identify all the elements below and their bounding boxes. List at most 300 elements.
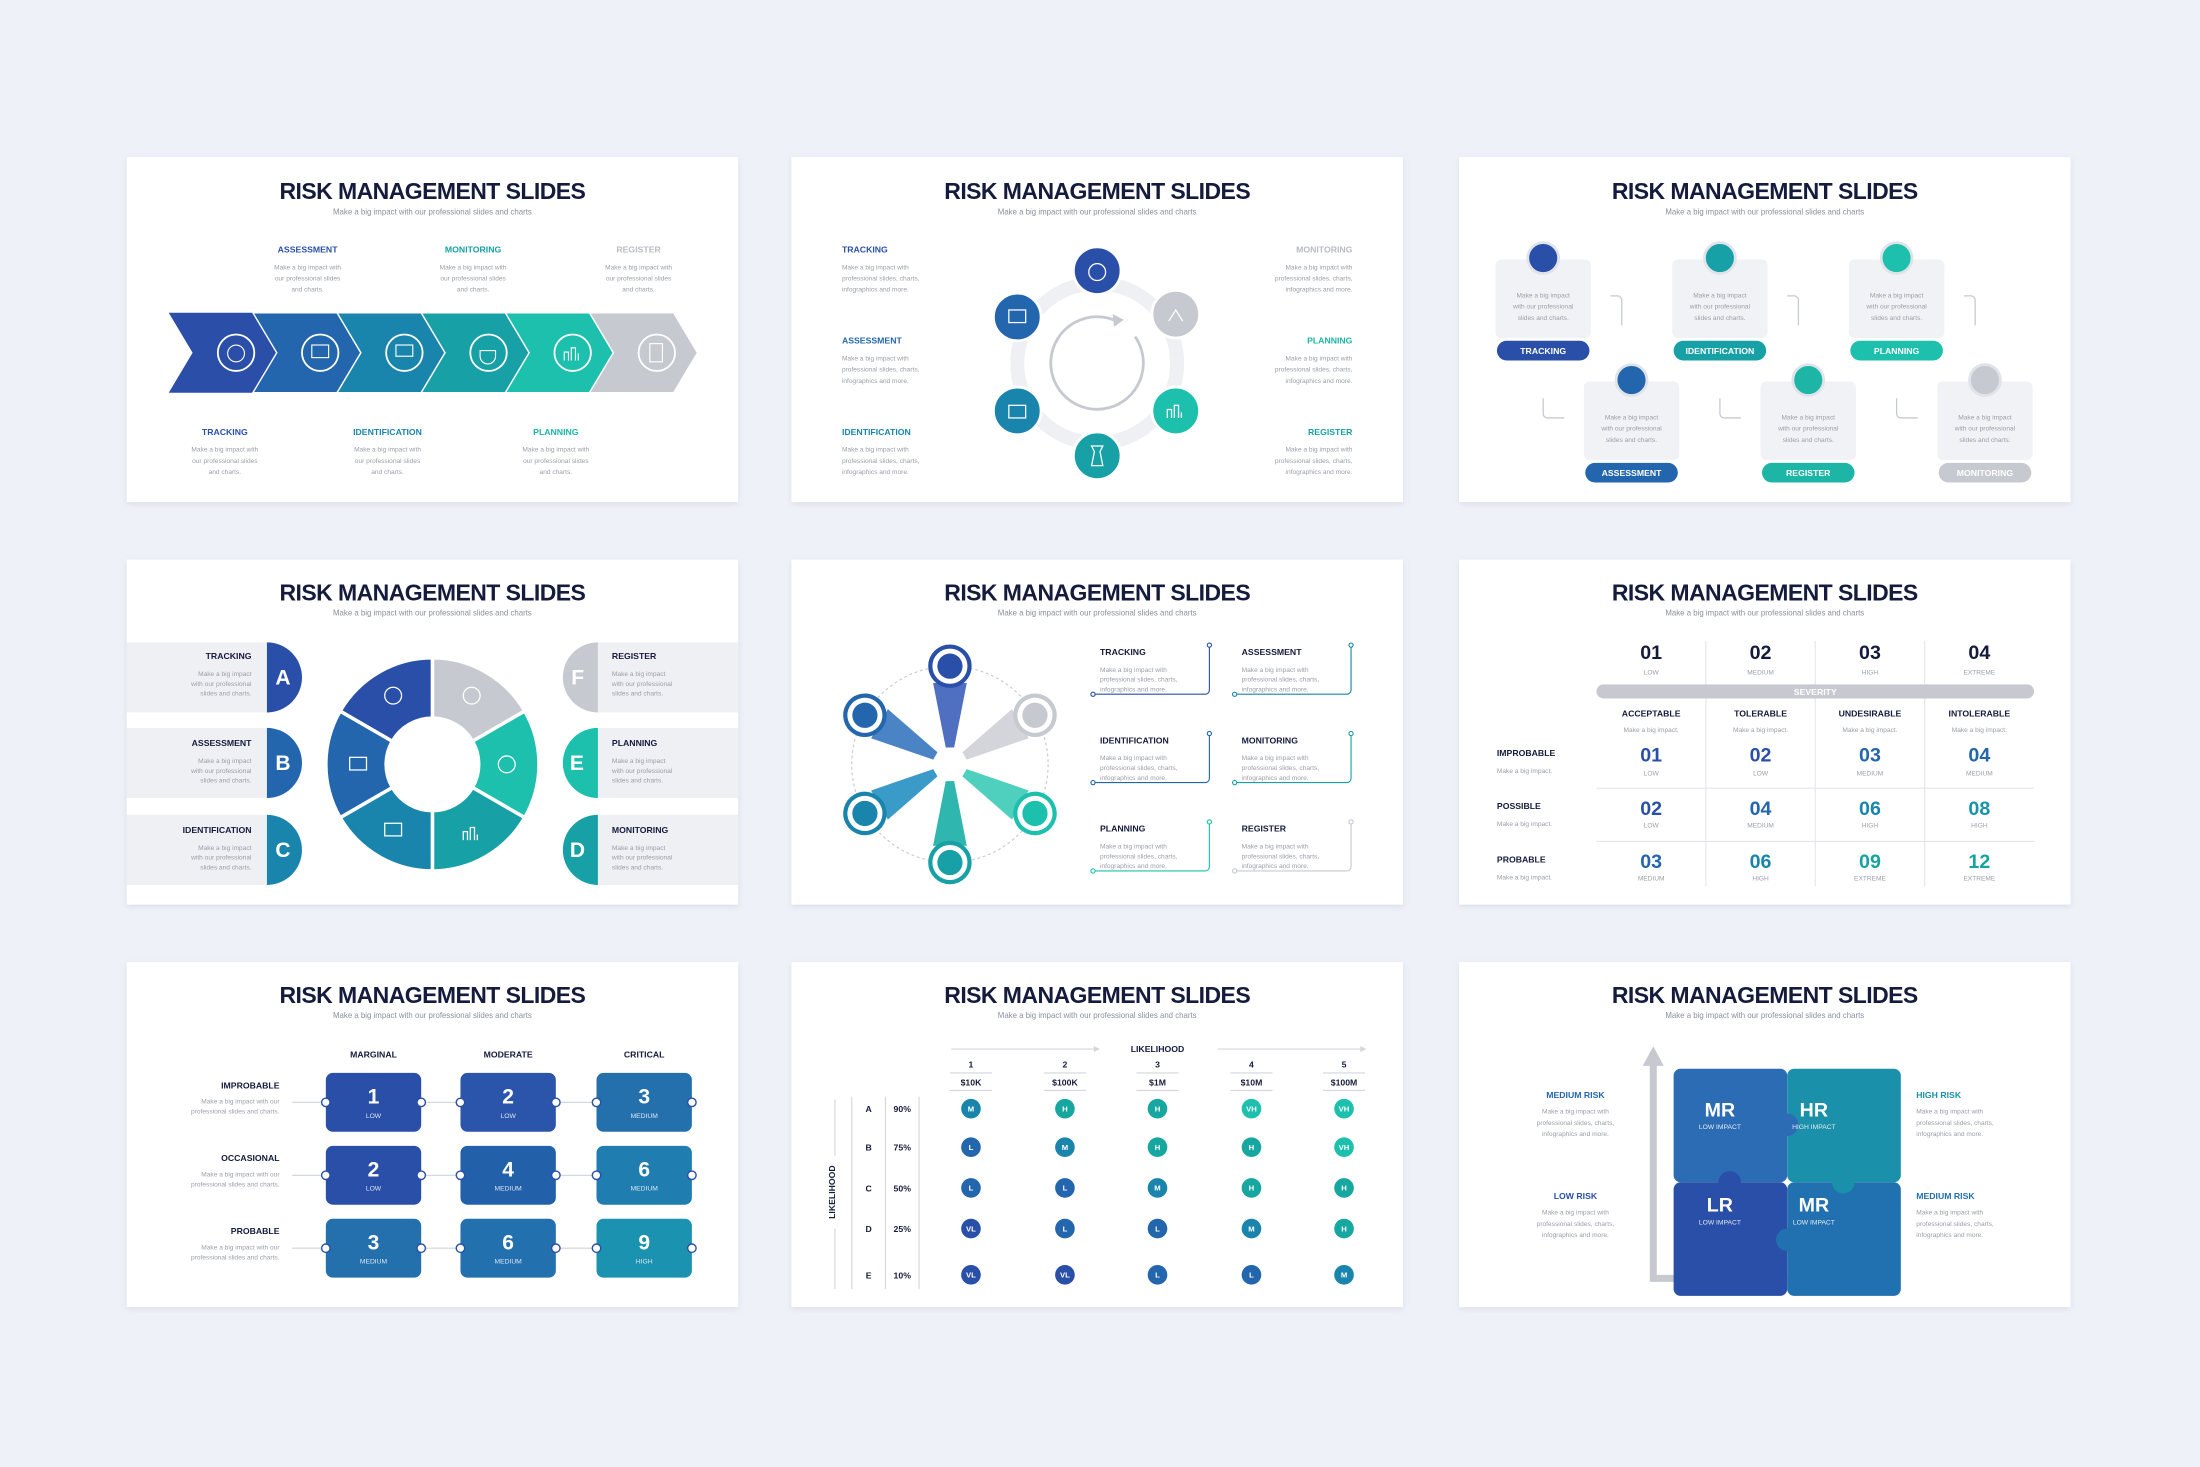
step labels top: Make a big impact with: [440, 264, 507, 271]
puzzle quadrants: HIGH IMPACT: [1792, 1124, 1836, 1131]
row labels: Make a big impact with our: [201, 1245, 280, 1252]
rating boxes: MEDIUM: [495, 1186, 522, 1193]
cards bottom row: slides and charts.: [1783, 437, 1834, 444]
cards top row: slides and charts.: [1694, 315, 1746, 322]
right labels: professional slides, charts,: [1275, 458, 1353, 465]
matrix table: MEDIUM: [1747, 822, 1774, 829]
heading: Make a big impact with our professional slides and charts: [333, 1011, 532, 1020]
rating dots: H: [1341, 1184, 1347, 1193]
left labels: professional slides, charts,: [842, 275, 920, 282]
risk labels: professional slides, charts,: [1537, 1221, 1614, 1228]
rating boxes: MEDIUM: [631, 1186, 658, 1193]
left items: with our professional: [190, 768, 252, 775]
heading: RISK MANAGEMENT SLIDES: [1612, 982, 1918, 1008]
right items: F: [571, 666, 584, 689]
text grid: PLANNING: [1100, 824, 1146, 834]
axis headers: $100K: [1052, 1078, 1078, 1088]
matrix table: LOW: [1644, 670, 1659, 677]
heading: Make a big impact with our professional slides and charts: [333, 609, 532, 618]
text grid: MONITORING: [1242, 735, 1298, 745]
right labels: PLANNING: [1307, 336, 1353, 346]
rating boxes: LOW: [500, 1113, 516, 1120]
right labels: REGISTER: [1308, 427, 1353, 437]
text grid: professional slides, charts,: [1100, 677, 1178, 684]
puzzle quadrants: [1674, 1069, 1901, 1296]
rating boxes: LOW: [366, 1113, 382, 1120]
heading: Make a big impact with our professional slides and charts: [333, 208, 532, 217]
matrix table: 01: [1640, 642, 1662, 664]
matrix table: MEDIUM: [1638, 876, 1665, 883]
matrix table: 02: [1750, 745, 1772, 767]
left labels: professional slides, charts,: [842, 458, 920, 465]
right items: [563, 642, 738, 885]
text grid: REGISTER: [1242, 824, 1287, 834]
matrix table: 02: [1640, 798, 1662, 820]
axis headers: 50%: [894, 1183, 911, 1193]
step labels top: REGISTER: [616, 244, 662, 254]
row labels: PROBABLE: [231, 1226, 280, 1236]
heading: RISK MANAGEMENT SLIDES: [944, 178, 1250, 204]
risk labels: [1537, 1090, 1994, 1239]
puzzle quadrants: LOW IMPACT: [1699, 1124, 1741, 1131]
cards bottom row: REGISTER: [1786, 468, 1831, 478]
rating dots: L: [969, 1143, 974, 1152]
puzzle quadrants: MR: [1705, 1099, 1735, 1121]
matrix table: Make a big impact.: [1842, 727, 1898, 734]
panel: slide 5 radial petals: [791, 560, 1403, 905]
row labels: professional slides and charts.: [191, 1109, 280, 1116]
heading: [944, 178, 1250, 217]
rating dots: M: [1154, 1184, 1161, 1193]
risk labels: infographics and more.: [1542, 1232, 1609, 1239]
matrix table: Make a big impact.: [1733, 727, 1788, 734]
risk labels: Make a big impact with: [1916, 1109, 1983, 1116]
step labels top: our professional slides: [440, 275, 507, 282]
left labels: Make a big impact with: [842, 355, 909, 362]
panel: slide 6 severity matrix: [1459, 560, 2071, 905]
rating boxes: 3: [368, 1232, 379, 1255]
left items: slides and charts.: [200, 865, 252, 872]
risk labels: Make a big impact with: [1542, 1109, 1609, 1116]
text grid: infographics and more.: [1100, 775, 1167, 782]
text grid: TRACKING: [1100, 647, 1146, 657]
rating dots: H: [1155, 1104, 1161, 1113]
matrix table: EXTREME: [1963, 670, 1996, 677]
heading: [279, 982, 586, 1020]
heading: Make a big impact with our professional slides and charts: [998, 1011, 1197, 1020]
right labels: Make a big impact with: [1286, 447, 1353, 454]
matrix table: TOLERABLE: [1734, 709, 1787, 719]
column headers: MARGINAL: [350, 1049, 398, 1059]
text grid: [1091, 643, 1353, 873]
matrix table: 04: [1968, 745, 1990, 767]
rating boxes: 1: [368, 1086, 380, 1109]
left items: [127, 642, 302, 885]
left labels: TRACKING: [842, 244, 888, 254]
rating dots: L: [1155, 1224, 1160, 1233]
right items: PLANNING: [612, 738, 658, 748]
row labels: professional slides and charts.: [191, 1254, 280, 1261]
cards bottom row: slides and charts.: [1959, 437, 2011, 444]
cards top row: Make a big impact: [1870, 292, 1923, 299]
right items: D: [570, 839, 585, 862]
panel: slide 7 impact boxes: [127, 962, 738, 1307]
matrix table: IMPROBABLE: [1497, 748, 1556, 758]
axis headers: $100M: [1331, 1078, 1357, 1088]
matrix table: SEVERITY: [1794, 687, 1837, 697]
right items: Make a big impact: [612, 758, 665, 765]
row labels: [191, 1080, 280, 1261]
text grid: Make a big impact with: [1242, 844, 1309, 851]
text grid: professional slides, charts,: [1242, 765, 1319, 772]
heading: RISK MANAGEMENT SLIDES: [1612, 579, 1918, 605]
right items: E: [570, 752, 584, 775]
rating dots: M: [1248, 1224, 1255, 1233]
rating boxes: LOW: [366, 1186, 382, 1193]
matrix table: LOW: [1753, 771, 1769, 778]
column headers: MODERATE: [484, 1049, 533, 1059]
text grid: infographics and more.: [1100, 686, 1167, 693]
matrix table: 03: [1859, 745, 1881, 767]
heading: RISK MANAGEMENT SLIDES: [279, 178, 586, 204]
matrix table: MEDIUM: [1857, 771, 1883, 778]
left items: A: [275, 666, 291, 689]
risk labels: HIGH RISK: [1916, 1090, 1962, 1100]
row labels: IMPROBABLE: [221, 1080, 280, 1090]
left labels: Make a big impact with: [842, 447, 909, 454]
axis headers: 3: [1155, 1059, 1160, 1069]
rating boxes: 2: [368, 1159, 379, 1182]
text grid: professional slides, charts,: [1242, 853, 1319, 860]
row labels: Make a big impact with our: [201, 1172, 280, 1179]
axis headers: 90%: [894, 1104, 911, 1114]
rating dots: L: [1155, 1271, 1160, 1280]
cards bottom row: Make a big impact: [1958, 414, 2012, 421]
step labels bottom: PLANNING: [533, 427, 579, 437]
left labels: infographics and more.: [842, 287, 909, 294]
heading: Make a big impact with our professional slides and charts: [1665, 208, 1864, 217]
step labels bottom: Make a big impact with: [522, 447, 590, 454]
right labels: Make a big impact with: [1286, 264, 1353, 271]
heading: Make a big impact with our professional slides and charts: [1665, 1011, 1864, 1020]
left items: Make a big impact: [198, 845, 252, 852]
right labels: infographics and more.: [1286, 469, 1353, 476]
axis headers: $10K: [961, 1078, 982, 1088]
text grid: Make a big impact with: [1242, 667, 1309, 674]
cards bottom row: with our professional: [1777, 426, 1839, 433]
right items: MONITORING: [612, 825, 668, 835]
matrix table: EXTREME: [1854, 876, 1886, 883]
heading: RISK MANAGEMENT SLIDES: [279, 579, 586, 605]
heading: [944, 579, 1250, 618]
left items: B: [275, 752, 291, 775]
rating dots: VH: [1339, 1143, 1350, 1152]
right items: Make a big impact: [612, 845, 665, 852]
rating boxes: 6: [502, 1232, 514, 1255]
step labels top: our professional slides: [606, 275, 672, 282]
matrix table: LOW: [1644, 822, 1659, 829]
axis headers: [827, 1044, 1365, 1289]
step labels bottom: our professional slides: [523, 458, 589, 465]
risk labels: infographics and more.: [1542, 1131, 1609, 1138]
puzzle quadrants: MR: [1799, 1195, 1829, 1217]
cards top row: TRACKING: [1520, 346, 1566, 356]
axis headers: $10M: [1241, 1078, 1262, 1088]
risk labels: Make a big impact with: [1916, 1210, 1983, 1217]
right items: slides and charts.: [612, 691, 663, 698]
step labels top: MONITORING: [445, 244, 501, 254]
puzzle quadrants: LR: [1707, 1195, 1733, 1217]
puzzle quadrants: LOW IMPACT: [1699, 1219, 1741, 1226]
axis headers: C: [865, 1183, 872, 1193]
puzzle quadrants: HR: [1800, 1099, 1828, 1121]
text grid: IDENTIFICATION: [1100, 735, 1169, 745]
matrix table: 02: [1750, 642, 1772, 664]
heading: [1612, 579, 1918, 618]
axis headers: LIKELIHOOD: [1131, 1044, 1184, 1054]
right labels: Make a big impact with: [1286, 355, 1353, 362]
matrix table: 04: [1750, 798, 1772, 820]
step labels top: our professional slides: [275, 275, 341, 282]
right labels: professional slides, charts,: [1275, 275, 1353, 282]
matrix table: Make a big impact.: [1624, 727, 1679, 734]
left items: Make a big impact: [198, 671, 252, 678]
rating boxes: 2: [502, 1086, 514, 1109]
rating dots: M: [1341, 1271, 1347, 1280]
matrix table: INTOLERABLE: [1949, 709, 2010, 719]
text grid: infographics and more.: [1100, 863, 1167, 870]
column headers: [350, 1049, 665, 1059]
panel: slide 9 puzzle quadrant: [1459, 962, 2071, 1307]
left items: C: [275, 839, 291, 862]
right items: Make a big impact: [612, 671, 665, 678]
matrix table: Make a big impact.: [1497, 768, 1552, 775]
row labels: OCCASIONAL: [221, 1153, 280, 1163]
step labels top: [274, 244, 672, 294]
step labels top: ASSESSMENT: [278, 244, 338, 254]
risk labels: professional slides, charts,: [1916, 1221, 1994, 1228]
left items: with our professional: [190, 681, 252, 688]
risk labels: infographics and more.: [1916, 1131, 1983, 1138]
matrix table: HIGH: [1862, 822, 1878, 829]
left items: slides and charts.: [200, 691, 252, 698]
left labels: [842, 244, 920, 476]
rating dots: L: [1063, 1184, 1068, 1193]
text grid: professional slides, charts,: [1100, 853, 1178, 860]
right labels: MONITORING: [1296, 244, 1353, 254]
rating boxes: HIGH: [636, 1259, 653, 1266]
chevron arrow: [169, 313, 697, 393]
left labels: professional slides, charts,: [842, 367, 920, 374]
matrix table: PROBABLE: [1497, 855, 1546, 865]
heading: Make a big impact with our professional slides and charts: [998, 208, 1197, 217]
risk labels: MEDIUM RISK: [1916, 1191, 1975, 1201]
rating dots: [961, 1099, 1354, 1285]
heading: [279, 579, 586, 618]
text grid: Make a big impact with: [1242, 755, 1309, 762]
matrix table: POSSIBLE: [1497, 801, 1541, 811]
text grid: Make a big impact with: [1100, 667, 1167, 674]
rating dots: H: [1249, 1143, 1255, 1152]
matrix table: UNDESIRABLE: [1839, 709, 1902, 719]
left items: TRACKING: [206, 651, 252, 661]
text grid: Make a big impact with: [1100, 844, 1167, 851]
risk labels: MEDIUM RISK: [1546, 1090, 1605, 1100]
heading: RISK MANAGEMENT SLIDES: [1612, 178, 1918, 204]
left labels: Make a big impact with: [842, 264, 909, 271]
axis headers: E: [866, 1270, 872, 1280]
right labels: [1275, 244, 1353, 476]
risk labels: LOW RISK: [1554, 1191, 1598, 1201]
matrix table: 01: [1640, 745, 1662, 767]
donut chart: [326, 658, 539, 871]
rating boxes: 3: [638, 1086, 650, 1109]
puzzle quadrants: LOW IMPACT: [1793, 1219, 1835, 1226]
step labels top: and charts.: [622, 287, 655, 294]
text grid: ASSESSMENT: [1242, 647, 1302, 657]
rating dots: L: [969, 1184, 974, 1193]
text grid: Make a big impact with: [1100, 755, 1167, 762]
heading: RISK MANAGEMENT SLIDES: [944, 579, 1250, 605]
row labels: Make a big impact with our: [201, 1099, 280, 1106]
left items: slides and charts.: [200, 778, 252, 785]
connector arrows: [1543, 296, 1975, 418]
matrix table: HIGH: [1862, 670, 1878, 677]
right labels: infographics and more.: [1286, 378, 1353, 385]
step labels bottom: our professional slides: [192, 458, 258, 465]
axis headers: A: [865, 1104, 872, 1114]
text grid: infographics and more.: [1242, 863, 1309, 870]
matrix table: MEDIUM: [1747, 670, 1774, 677]
rating dots: H: [1155, 1143, 1161, 1152]
heading: [1612, 178, 1918, 217]
rating dots: VL: [1060, 1271, 1070, 1280]
right items: with our professional: [611, 681, 673, 688]
right items: with our professional: [611, 855, 673, 862]
step labels bottom: [191, 427, 590, 476]
axis headers: $1M: [1149, 1078, 1166, 1088]
left items: Make a big impact: [198, 758, 252, 765]
cards bottom row: Make a big impact: [1605, 414, 1658, 421]
rating dots: L: [1249, 1271, 1254, 1280]
panel: slide 1 chevron process: [127, 157, 738, 502]
heading: RISK MANAGEMENT SLIDES: [279, 982, 586, 1008]
matrix table: Make a big impact.: [1952, 727, 2007, 734]
panel: slide 4 donut: [127, 560, 738, 905]
axis headers: 5: [1342, 1059, 1347, 1069]
cards top row: Make a big impact: [1693, 292, 1747, 299]
axis headers: 2: [1063, 1059, 1068, 1069]
matrix table: 04: [1968, 642, 1990, 664]
right items: with our professional: [611, 768, 673, 775]
heading: [1612, 982, 1918, 1020]
panel: slide 3 cards: [1459, 157, 2071, 502]
right items: slides and charts.: [612, 865, 663, 872]
matrix table: 03: [1640, 851, 1662, 873]
rating dots: VH: [1339, 1104, 1350, 1113]
matrix table: [1497, 641, 2034, 886]
step labels bottom: and charts.: [371, 469, 404, 476]
cards bottom row: with our professional: [1954, 426, 2016, 433]
matrix table: LOW: [1644, 771, 1659, 778]
matrix table: 06: [1750, 851, 1772, 873]
risk labels: infographics and more.: [1916, 1232, 1983, 1239]
axis headers: LIKELIHOOD: [827, 1165, 837, 1219]
step labels bottom: TRACKING: [202, 427, 248, 437]
axis headers: D: [865, 1224, 872, 1234]
step labels top: Make a big impact with: [274, 264, 341, 271]
left labels: infographics and more.: [842, 469, 909, 476]
text grid: infographics and more.: [1242, 775, 1309, 782]
step labels bottom: Make a big impact with: [191, 447, 259, 454]
step labels bottom: our professional slides: [355, 458, 421, 465]
rating dots: H: [1341, 1224, 1347, 1233]
heading: RISK MANAGEMENT SLIDES: [944, 982, 1250, 1008]
right items: slides and charts.: [612, 778, 663, 785]
matrix table: 06: [1859, 798, 1881, 820]
axes arrow: [1643, 1046, 1884, 1289]
cards top row: [1496, 243, 1944, 360]
step labels bottom: Make a big impact with: [354, 447, 421, 454]
panel: slide 8 likelihood grid: [791, 962, 1403, 1307]
heading: [279, 178, 586, 217]
heading: [944, 982, 1250, 1020]
matrix table: HIGH: [1971, 822, 1988, 829]
step labels top: and charts.: [457, 287, 490, 294]
right labels: infographics and more.: [1286, 287, 1353, 294]
rating dots: H: [1249, 1184, 1255, 1193]
step labels bottom: and charts.: [209, 469, 241, 476]
rating boxes: MEDIUM: [360, 1259, 388, 1266]
left labels: ASSESSMENT: [842, 336, 902, 346]
rating dots: VL: [966, 1224, 976, 1233]
axis headers: 4: [1249, 1059, 1254, 1069]
matrix table: 09: [1859, 851, 1881, 873]
cards bottom row: ASSESSMENT: [1602, 468, 1662, 478]
step labels top: Make a big impact with: [605, 264, 672, 271]
cards top row: Make a big impact: [1516, 292, 1570, 299]
heading: Make a big impact with our professional slides and charts: [1665, 609, 1864, 618]
text grid: professional slides, charts,: [1100, 765, 1178, 772]
cards bottom row: Make a big impact: [1782, 414, 1835, 421]
rating dots: H: [1062, 1104, 1068, 1113]
heading: Make a big impact with our professional slides and charts: [998, 609, 1197, 618]
cards top row: with our professional: [1512, 304, 1574, 311]
rating boxes: MEDIUM: [495, 1259, 522, 1266]
text grid: professional slides, charts,: [1242, 677, 1319, 684]
matrix table: 08: [1968, 798, 1990, 820]
rating dots: L: [1063, 1224, 1068, 1233]
rating boxes: 6: [638, 1159, 650, 1182]
cards bottom row: with our professional: [1600, 426, 1662, 433]
step labels bottom: and charts.: [540, 469, 572, 476]
matrix table: ACCEPTABLE: [1622, 709, 1681, 719]
column headers: CRITICAL: [624, 1049, 665, 1059]
cards top row: with our professional: [1689, 304, 1751, 311]
risk labels: professional slides, charts,: [1537, 1120, 1614, 1127]
cards top row: IDENTIFICATION: [1685, 346, 1754, 356]
matrix table: Make a big impact.: [1497, 874, 1552, 881]
rating dots: VL: [966, 1271, 976, 1280]
axis headers: B: [865, 1143, 872, 1153]
left items: ASSESSMENT: [192, 738, 252, 748]
matrix table: 03: [1859, 642, 1881, 664]
risk labels: professional slides, charts,: [1916, 1120, 1994, 1127]
rating dots: M: [1062, 1143, 1068, 1152]
matrix table: MEDIUM: [1966, 771, 1993, 778]
cards top row: slides and charts.: [1518, 315, 1569, 322]
matrix table: 12: [1968, 851, 1990, 873]
